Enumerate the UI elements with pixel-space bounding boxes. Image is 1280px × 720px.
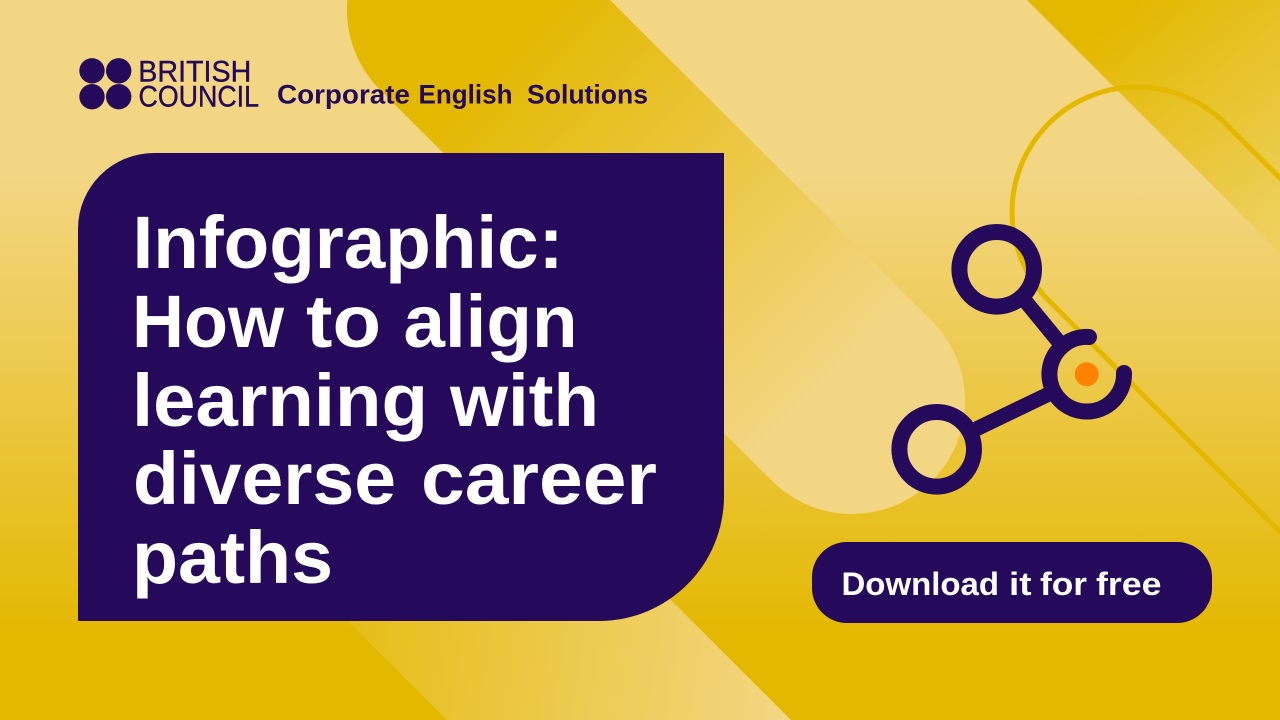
panel background (78, 153, 724, 621)
centre open ring (1049, 337, 1124, 412)
button label (842, 566, 1162, 602)
diagonal band: top centre (460, 10, 852, 401)
button label: Download (842, 566, 999, 602)
logo wordmark: BRITISH (138, 56, 251, 88)
heading: How (132, 280, 284, 363)
heading: career (421, 437, 657, 520)
logo dots (79, 58, 131, 109)
rounded outline stroke (1012, 87, 1280, 552)
orange dot (1075, 362, 1099, 386)
heading (132, 201, 657, 599)
connector lines (970, 297, 1063, 432)
subtitle: Corporate English Solutions (277, 80, 648, 110)
heading: with (449, 359, 599, 442)
heading: diverse (133, 437, 396, 520)
logo wordmark (138, 56, 259, 114)
button label: for (1040, 566, 1087, 602)
diagonal band: bottom (300, 529, 800, 720)
button label: it (1009, 566, 1032, 602)
icon: connected nodes (899, 232, 1124, 487)
heading: align (404, 280, 578, 363)
heading: Infographic: (132, 201, 564, 284)
button: download (812, 542, 1212, 623)
title panel (78, 153, 724, 621)
diagonal band: top right corner (1027, 0, 1280, 253)
heading: learning (132, 359, 428, 442)
heading: paths (132, 516, 333, 599)
bottom node (899, 412, 974, 487)
logo wordmark: COUNCIL (138, 80, 259, 114)
subtitle: Corporate English Solutions: English (418, 80, 512, 110)
subtitle: Corporate English Solutions: Corporate (277, 80, 410, 110)
subtitle: Corporate English Solutions: Solutions (527, 80, 648, 110)
button background (812, 542, 1212, 623)
button label: free (1096, 566, 1162, 602)
logo: British Council (79, 56, 259, 114)
heading: to (306, 280, 381, 363)
top node (959, 232, 1034, 307)
